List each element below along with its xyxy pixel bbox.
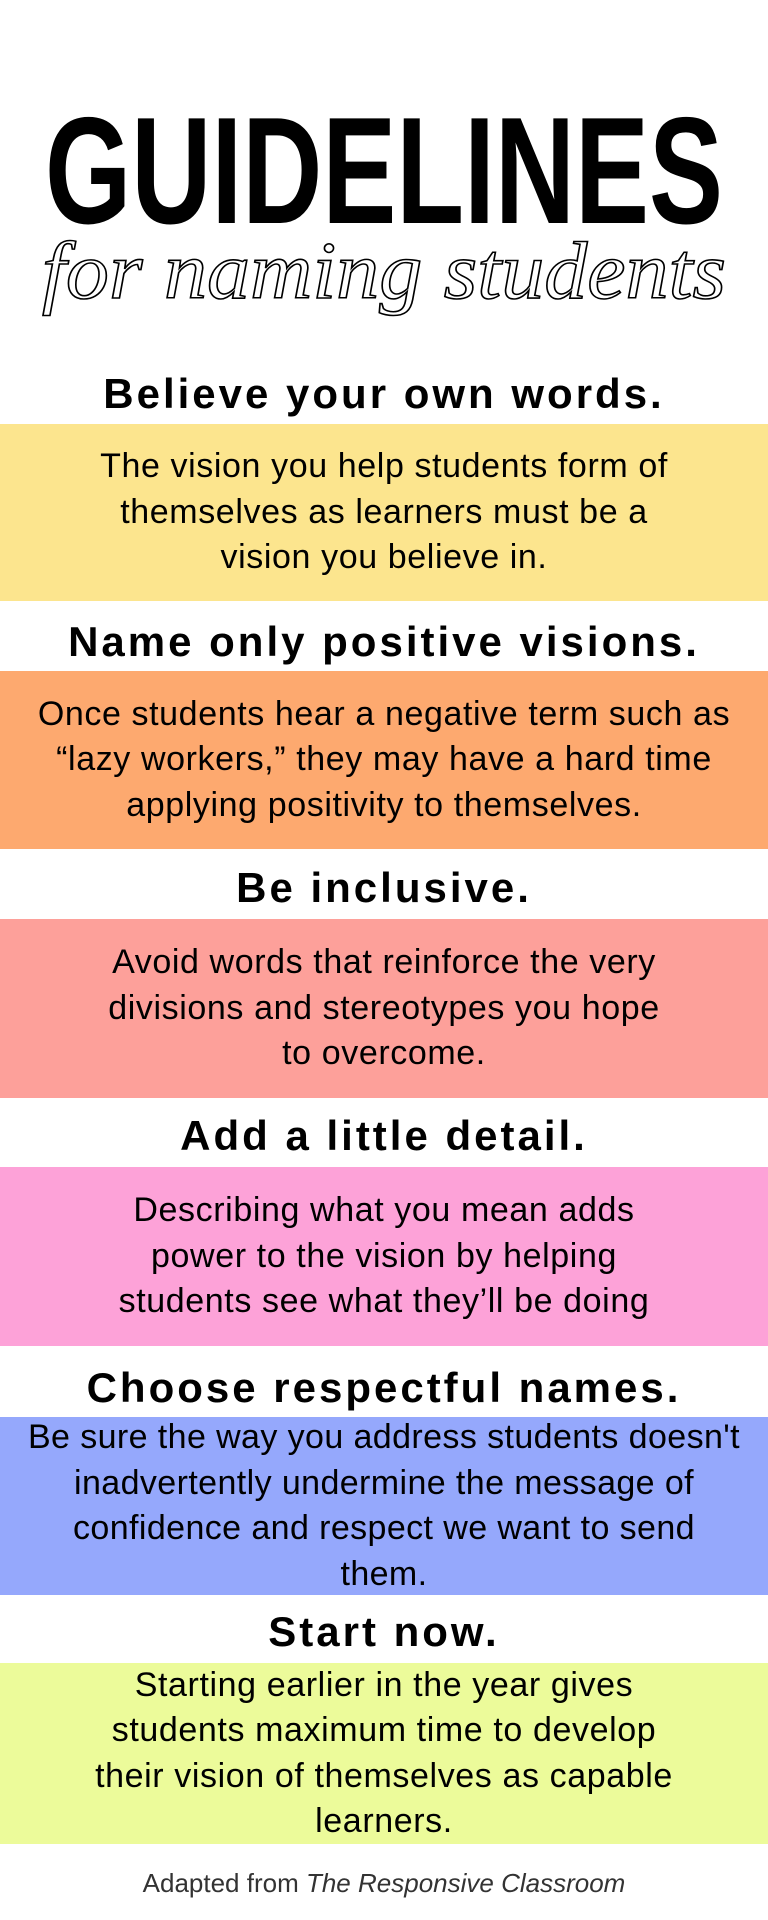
band 3: divisions and stereotypes you hope (108, 989, 660, 1027)
band 2: Once students hear a negative term such as (38, 695, 730, 733)
heading 3: Be inclusive. (236, 864, 532, 911)
band 5 (0, 1417, 768, 1595)
band 6: Starting earlier in the year gives (135, 1666, 633, 1704)
band 5: Be sure the way you address students doesn't (28, 1418, 740, 1456)
band 5: inadvertently undermine the message of (74, 1464, 694, 1502)
band 5: them. (340, 1554, 428, 1592)
band 2: applying positivity to themselves. (126, 786, 642, 824)
band 2 (0, 671, 768, 849)
heading 6: Start now. (268, 1608, 500, 1655)
footer credit: Adapted from The Responsive Classroom (143, 1868, 625, 1898)
heading 4: Add a little detail. (180, 1112, 588, 1159)
band 1: vision you believe in. (221, 538, 547, 576)
band 6: students maximum time to develop (112, 1711, 656, 1749)
band 2: “lazy workers,” they may have a hard time (56, 740, 712, 778)
band 1: themselves as learners must be a (120, 493, 648, 531)
band 4: Describing what you mean adds (133, 1191, 635, 1229)
band 4: power to the vision by helping (151, 1237, 617, 1275)
band 1 (0, 424, 768, 601)
band 4 (0, 1167, 768, 1346)
band 3: Avoid words that reinforce the very (112, 943, 656, 981)
band 5: confidence and respect we want to send (73, 1509, 695, 1547)
title: for naming students (42, 225, 726, 316)
band 3: to overcome. (282, 1034, 486, 1072)
band 1: The vision you help students form of (100, 447, 668, 485)
heading 5: Choose respectful names. (87, 1364, 681, 1411)
band 3 (0, 919, 768, 1098)
band 6: their vision of themselves as capable (95, 1756, 673, 1794)
band 4: students see what they’ll be doing (119, 1282, 649, 1320)
band 6: learners. (315, 1802, 453, 1840)
band 6 (0, 1663, 768, 1844)
heading 2: Name only positive visions. (68, 618, 700, 665)
heading 1: Believe your own words. (103, 370, 665, 417)
